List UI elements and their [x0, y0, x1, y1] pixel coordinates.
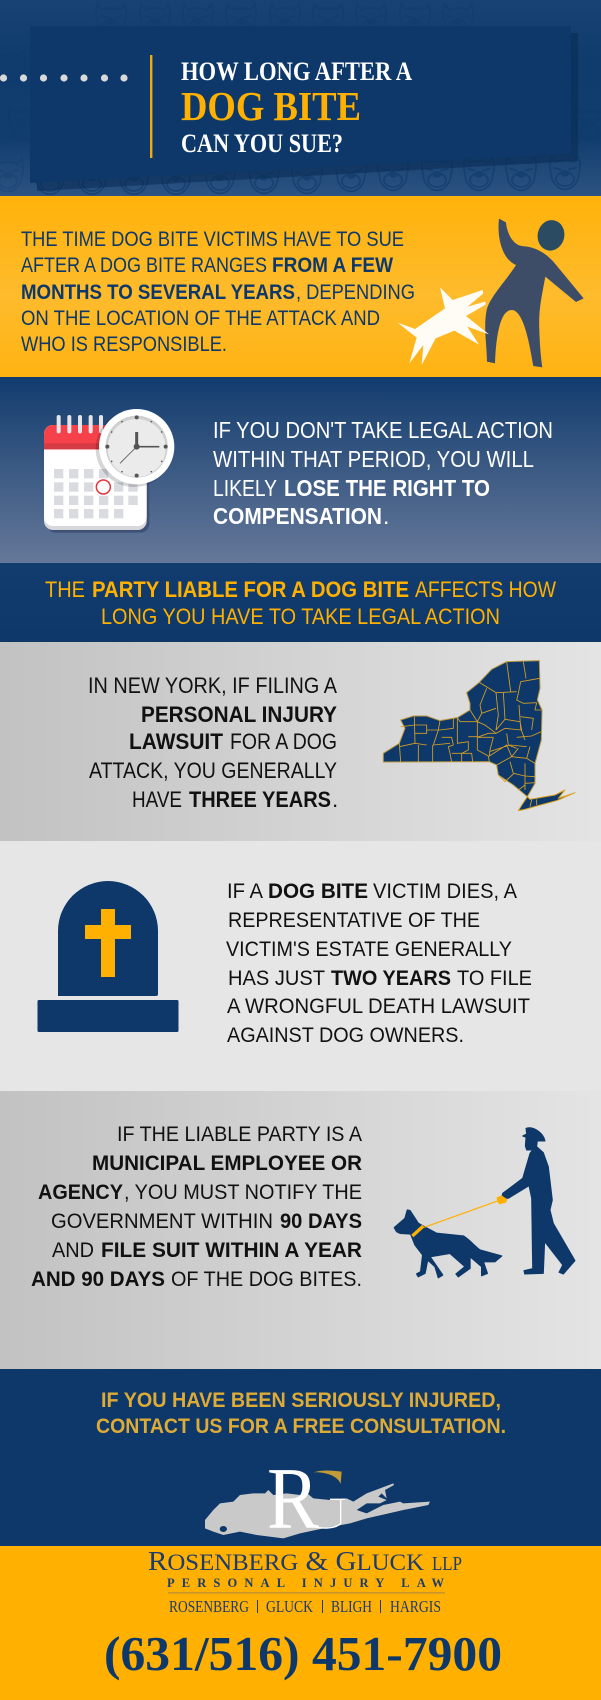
- text block: FILE SUIT WITHIN A YEAR: [101, 1238, 362, 1262]
- text block: , YOU MUST NOTIFY THE: [124, 1180, 362, 1204]
- text block: OF THE DOG BITES.: [171, 1267, 362, 1291]
- text block: AGENCY: [38, 1180, 123, 1204]
- text block: MUNICIPAL EMPLOYEE OR: [92, 1151, 362, 1175]
- text block: WHO IS RESPONSIBLE.: [21, 332, 227, 356]
- text block: FOR A DOG: [230, 729, 337, 754]
- partner names: HARGIS: [390, 1597, 441, 1616]
- panel: header: [0, 0, 601, 196]
- heading: PARTY LIABLE FOR A DOG BITE: [92, 577, 409, 602]
- heading: THE: [45, 577, 85, 602]
- text block: GOVERNMENT WITHIN: [51, 1209, 273, 1233]
- partner names: [169, 1597, 441, 1616]
- text block: TWO YEARS: [331, 966, 451, 990]
- title: DOG BITE: [181, 83, 361, 129]
- title: HOW LONG AFTER A: [181, 57, 412, 86]
- text block: VICTIM'S ESTATE GENERALLY: [226, 937, 512, 961]
- text block: IN NEW YORK, IF FILING A: [88, 673, 337, 698]
- text block: AFTER A DOG BITE RANGES: [21, 253, 267, 277]
- text block: HAS JUST: [228, 966, 325, 990]
- panel: footer: [0, 1546, 601, 1700]
- map: New York State counties: [383, 661, 575, 811]
- partner names: ROSENBERG: [169, 1597, 249, 1616]
- text block: IF THE LIABLE PARTY IS A: [117, 1122, 363, 1146]
- text block: REPRESENTATIVE OF THE: [228, 908, 480, 932]
- panel: wrongful death: [0, 841, 601, 1091]
- text block: , DEPENDING: [296, 280, 415, 304]
- panel: time range: [0, 196, 601, 377]
- text block: AND 90 DAYS: [31, 1267, 165, 1291]
- text block: AGAINST DOG OWNERS.: [227, 1023, 464, 1047]
- divider bar: [150, 55, 152, 158]
- text block: FROM A FEW: [272, 253, 394, 277]
- text block: [31, 1122, 363, 1291]
- text block: [21, 227, 415, 356]
- text block: COMPENSATION: [213, 503, 382, 529]
- text block: .: [332, 787, 338, 812]
- heading: LONG YOU HAVE TO TAKE LEGAL ACTION: [101, 604, 500, 629]
- text block: THREE YEARS: [189, 787, 331, 812]
- partner names: GLUCK: [266, 1597, 314, 1616]
- panel: municipal employee: [0, 1091, 601, 1369]
- heading: [45, 577, 557, 629]
- firm name: ROSENBERG & GLUCK: [148, 1546, 424, 1576]
- text block: THE TIME DOG BITE VICTIMS HAVE TO SUE: [21, 227, 404, 251]
- text block: [88, 673, 338, 812]
- panel: lose the right: [0, 377, 601, 563]
- text block: [213, 417, 553, 529]
- text block: A WRONGFUL DEATH LAWSUIT: [227, 994, 530, 1018]
- callout: IF YOU HAVE BEEN SERIOUSLY INJURED,: [101, 1388, 501, 1412]
- logo: Long Island with monogram: R: [267, 1451, 319, 1548]
- logo: Long Island with monogram: [205, 1451, 430, 1548]
- callout: [96, 1388, 506, 1438]
- text block: IF A: [227, 879, 264, 903]
- callout: CONTACT US FOR A FREE CONSULTATION.: [96, 1414, 506, 1438]
- text block: LAWSUIT: [129, 729, 223, 754]
- partner names: BLIGH: [331, 1597, 372, 1616]
- panel: New York three years: [0, 642, 601, 841]
- dotted line: [0, 74, 128, 82]
- dog face pattern: [0, 4, 601, 194]
- text block: [226, 879, 532, 1047]
- text block: MONTHS TO SEVERAL YEARS: [21, 280, 295, 304]
- text block: ON THE LOCATION OF THE ATTACK AND: [21, 306, 380, 330]
- text block: LIKELY: [213, 475, 277, 501]
- text block: ATTACK, YOU GENERALLY: [89, 758, 337, 783]
- text block: PERSONAL INJURY: [141, 702, 337, 727]
- icon: person attacked by dog: [398, 218, 584, 367]
- text block: HAVE: [132, 787, 182, 812]
- heading: AFFECTS HOW: [415, 577, 557, 602]
- icon: gravestone: [38, 881, 178, 1032]
- title: [181, 57, 412, 158]
- text block: 90 DAYS: [280, 1209, 362, 1233]
- text block: LOSE THE RIGHT TO: [284, 475, 490, 501]
- text block: WITHIN THAT PERIOD, YOU WILL: [213, 446, 534, 472]
- phone number: (631/516) 451-7900: [104, 1626, 502, 1681]
- firm name: LLP: [432, 1553, 462, 1575]
- text block: DOG BITE: [268, 879, 368, 903]
- firm name: PERSONAL INJURY LAW: [167, 1576, 444, 1590]
- text block: AND: [52, 1238, 94, 1262]
- icon: calendar and clock: [44, 409, 174, 533]
- frame shadow: [37, 33, 578, 191]
- panel: party liable band: [0, 563, 601, 642]
- text block: TO FILE: [457, 966, 532, 990]
- frame panel: [30, 26, 571, 183]
- panel: call to action: [0, 1369, 601, 1548]
- text block: .: [383, 503, 389, 529]
- title: CAN YOU SUE?: [181, 129, 343, 158]
- icon: officer walking dog: [394, 1128, 575, 1278]
- firm name: [148, 1546, 462, 1590]
- text block: VICTIM DIES, A: [373, 879, 518, 903]
- text block: IF YOU DON'T TAKE LEGAL ACTION: [213, 417, 553, 443]
